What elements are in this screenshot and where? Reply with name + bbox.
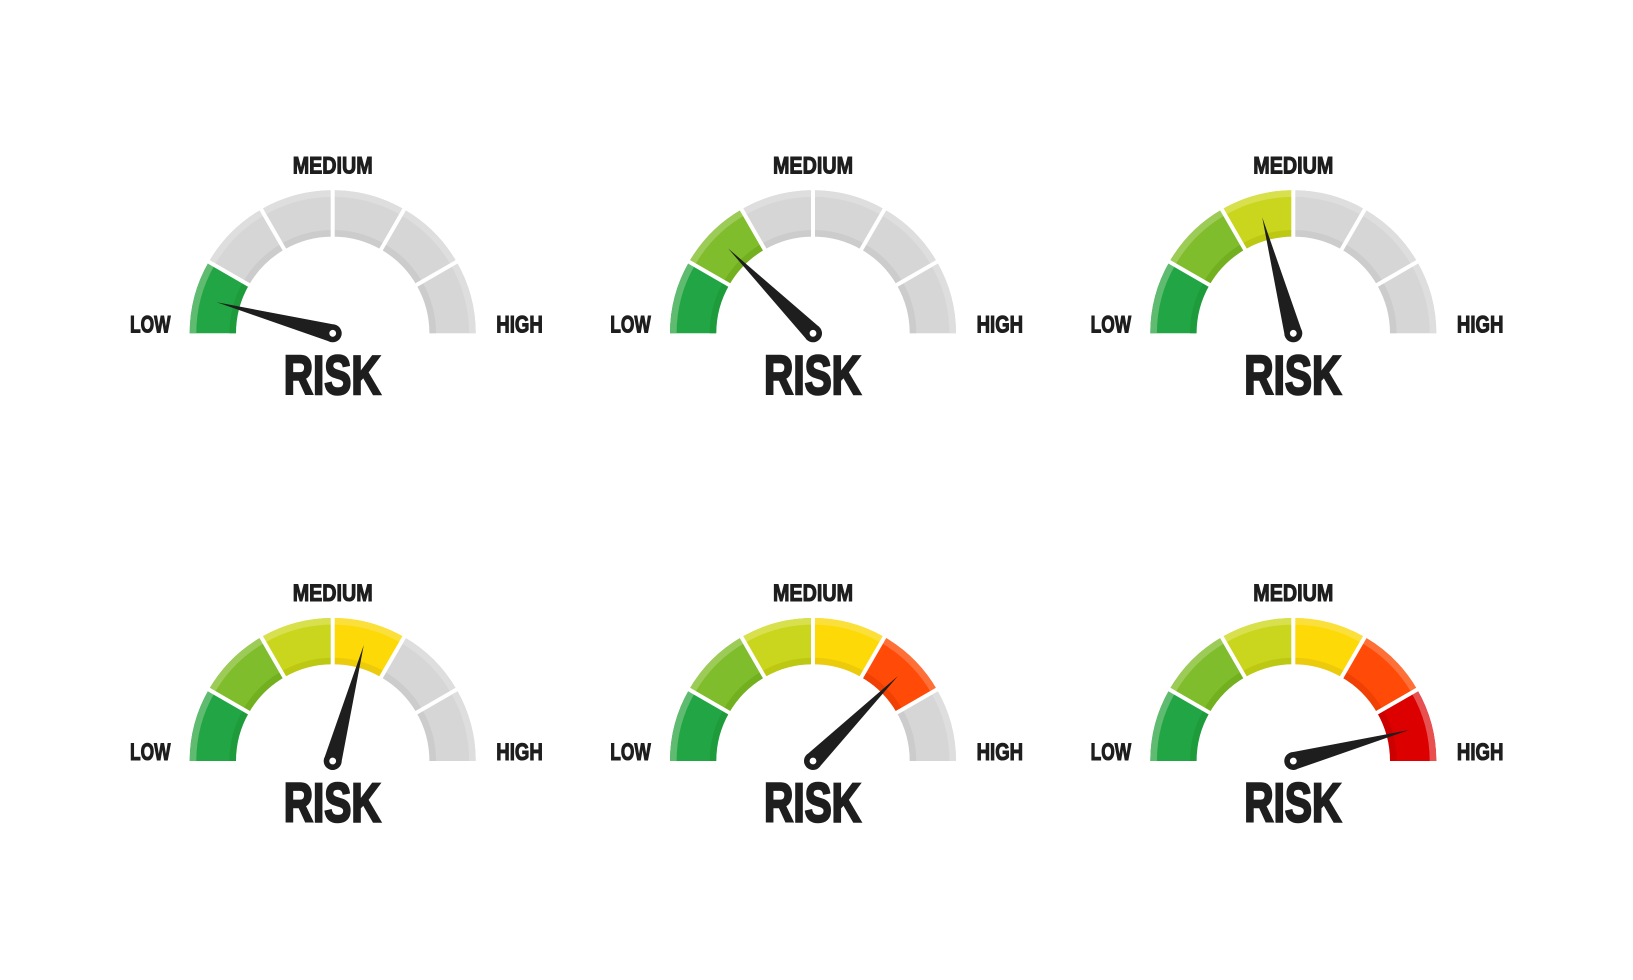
- label: risk: RISK: [1244, 344, 1342, 406]
- label: medium: MEDIUM: [773, 580, 853, 607]
- gauge 1: low risk: [130, 152, 543, 406]
- label: risk: RISK: [284, 344, 381, 406]
- label: risk: RISK: [1244, 772, 1342, 834]
- needle: [214, 294, 344, 344]
- label: risk: RISK: [764, 772, 861, 834]
- needle: [722, 242, 826, 346]
- label: low: LOW: [130, 739, 171, 766]
- needle: [1282, 721, 1412, 772]
- label: high: HIGH: [977, 311, 1023, 338]
- label: high: HIGH: [977, 739, 1023, 766]
- dial segments: [673, 185, 953, 333]
- label: medium: MEDIUM: [293, 152, 373, 179]
- label: medium: MEDIUM: [1253, 152, 1333, 179]
- label: low: LOW: [130, 311, 171, 338]
- label: medium: MEDIUM: [1253, 580, 1333, 607]
- dial segments: [673, 613, 953, 761]
- label: risk: RISK: [764, 344, 861, 406]
- gauge 5: medium-high risk: [610, 580, 1023, 834]
- needle: [1254, 215, 1304, 344]
- label: high: HIGH: [496, 311, 543, 338]
- gauge 3: below-medium risk: [1091, 152, 1503, 406]
- dial segments: [1154, 185, 1433, 333]
- label: risk: RISK: [284, 772, 381, 834]
- label: low: LOW: [610, 739, 651, 766]
- gauge 2: low-medium risk: [610, 152, 1023, 406]
- label: low: LOW: [1091, 739, 1131, 766]
- gauge 4: above-medium risk: [130, 580, 543, 834]
- label: medium: MEDIUM: [293, 580, 373, 607]
- label: high: HIGH: [1457, 739, 1503, 766]
- needle: [322, 643, 372, 772]
- label: low: LOW: [610, 311, 651, 338]
- label: high: HIGH: [496, 739, 543, 766]
- gauge 6: high risk: [1091, 580, 1503, 834]
- label: high: HIGH: [1457, 311, 1503, 338]
- dial segments: [1154, 613, 1433, 761]
- label: low: LOW: [1091, 311, 1131, 338]
- dial segments: [193, 185, 472, 333]
- label: medium: MEDIUM: [773, 152, 853, 179]
- needle: [800, 670, 904, 774]
- dial segments: [193, 613, 472, 761]
